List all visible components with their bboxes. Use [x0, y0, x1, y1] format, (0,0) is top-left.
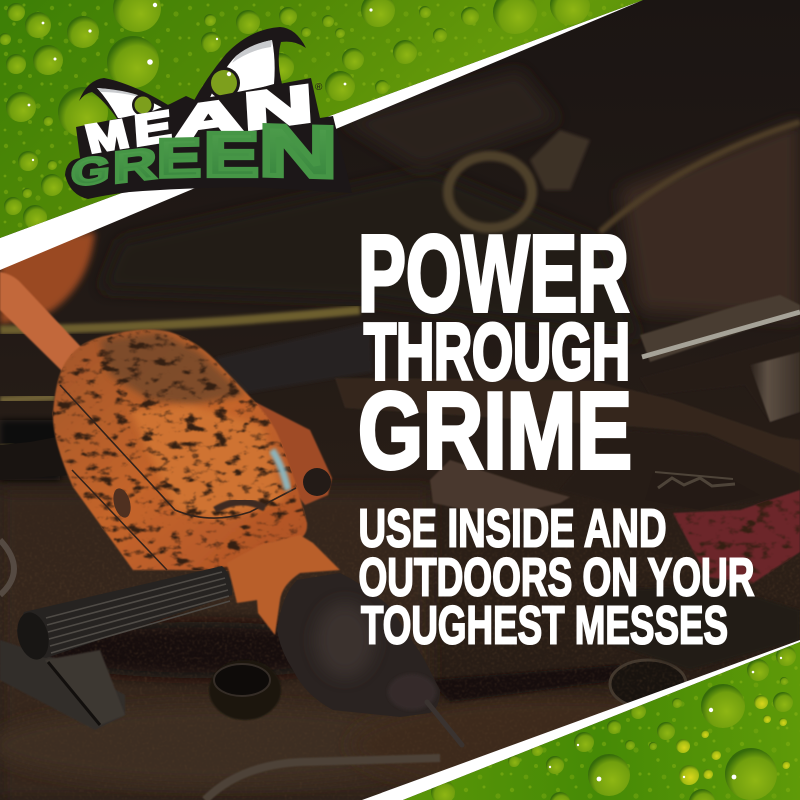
orange drill	[0, 272, 462, 745]
rear knob	[0, 436, 85, 480]
curved rod bottom	[205, 758, 440, 800]
rusty block	[430, 460, 570, 517]
logo black plate	[65, 78, 352, 199]
subheading	[358, 498, 754, 656]
drill handle	[0, 272, 82, 372]
logo wordmark: GREEN: R	[113, 139, 156, 193]
logo eye: left	[79, 78, 173, 122]
dark rear grip	[215, 322, 372, 394]
logo eye: right	[192, 27, 306, 104]
water drops	[0, 0, 590, 229]
logo wordmark: MEAN: M	[81, 111, 133, 162]
gear	[645, 472, 760, 510]
drill body	[50, 325, 310, 575]
logo wordmark: MEAN: A	[174, 88, 243, 150]
subheading: USE INSIDE AND	[358, 498, 666, 558]
logo wordmark: GREEN: N	[259, 111, 337, 193]
registered mark: ®	[315, 82, 323, 93]
logo wordmark: GREEN: E	[157, 127, 201, 189]
bottom green water-drop panel	[400, 640, 800, 800]
water drops	[431, 646, 796, 800]
logo wordmark: GREEN: G	[69, 149, 112, 195]
bottom-left wrench	[0, 540, 125, 730]
bottom white diagonal band	[362, 640, 800, 800]
chuck	[277, 573, 440, 717]
socket	[209, 660, 281, 720]
logo wordmark: GREEN	[69, 111, 337, 195]
drill side bracket	[255, 402, 332, 505]
logo wordmark: MEAN	[81, 74, 314, 162]
logo wordmark: MEAN: N	[242, 74, 314, 141]
orange cap	[0, 232, 95, 325]
logo wordmark: MEAN: E	[132, 101, 173, 155]
drill collar	[227, 535, 340, 635]
top green water-drop panel	[0, 0, 650, 240]
headline	[358, 213, 632, 492]
headline: POWER	[358, 213, 629, 335]
headline: GRIME	[358, 370, 632, 492]
tools on right	[640, 295, 800, 362]
logo wordmark: GREEN: E	[204, 121, 259, 190]
red tool	[670, 485, 800, 585]
headline: THROUGH	[364, 307, 630, 396]
ribbed grip	[13, 566, 232, 663]
top white diagonal band	[0, 0, 643, 270]
rope	[0, 310, 360, 330]
Mean Green logo	[65, 27, 352, 199]
